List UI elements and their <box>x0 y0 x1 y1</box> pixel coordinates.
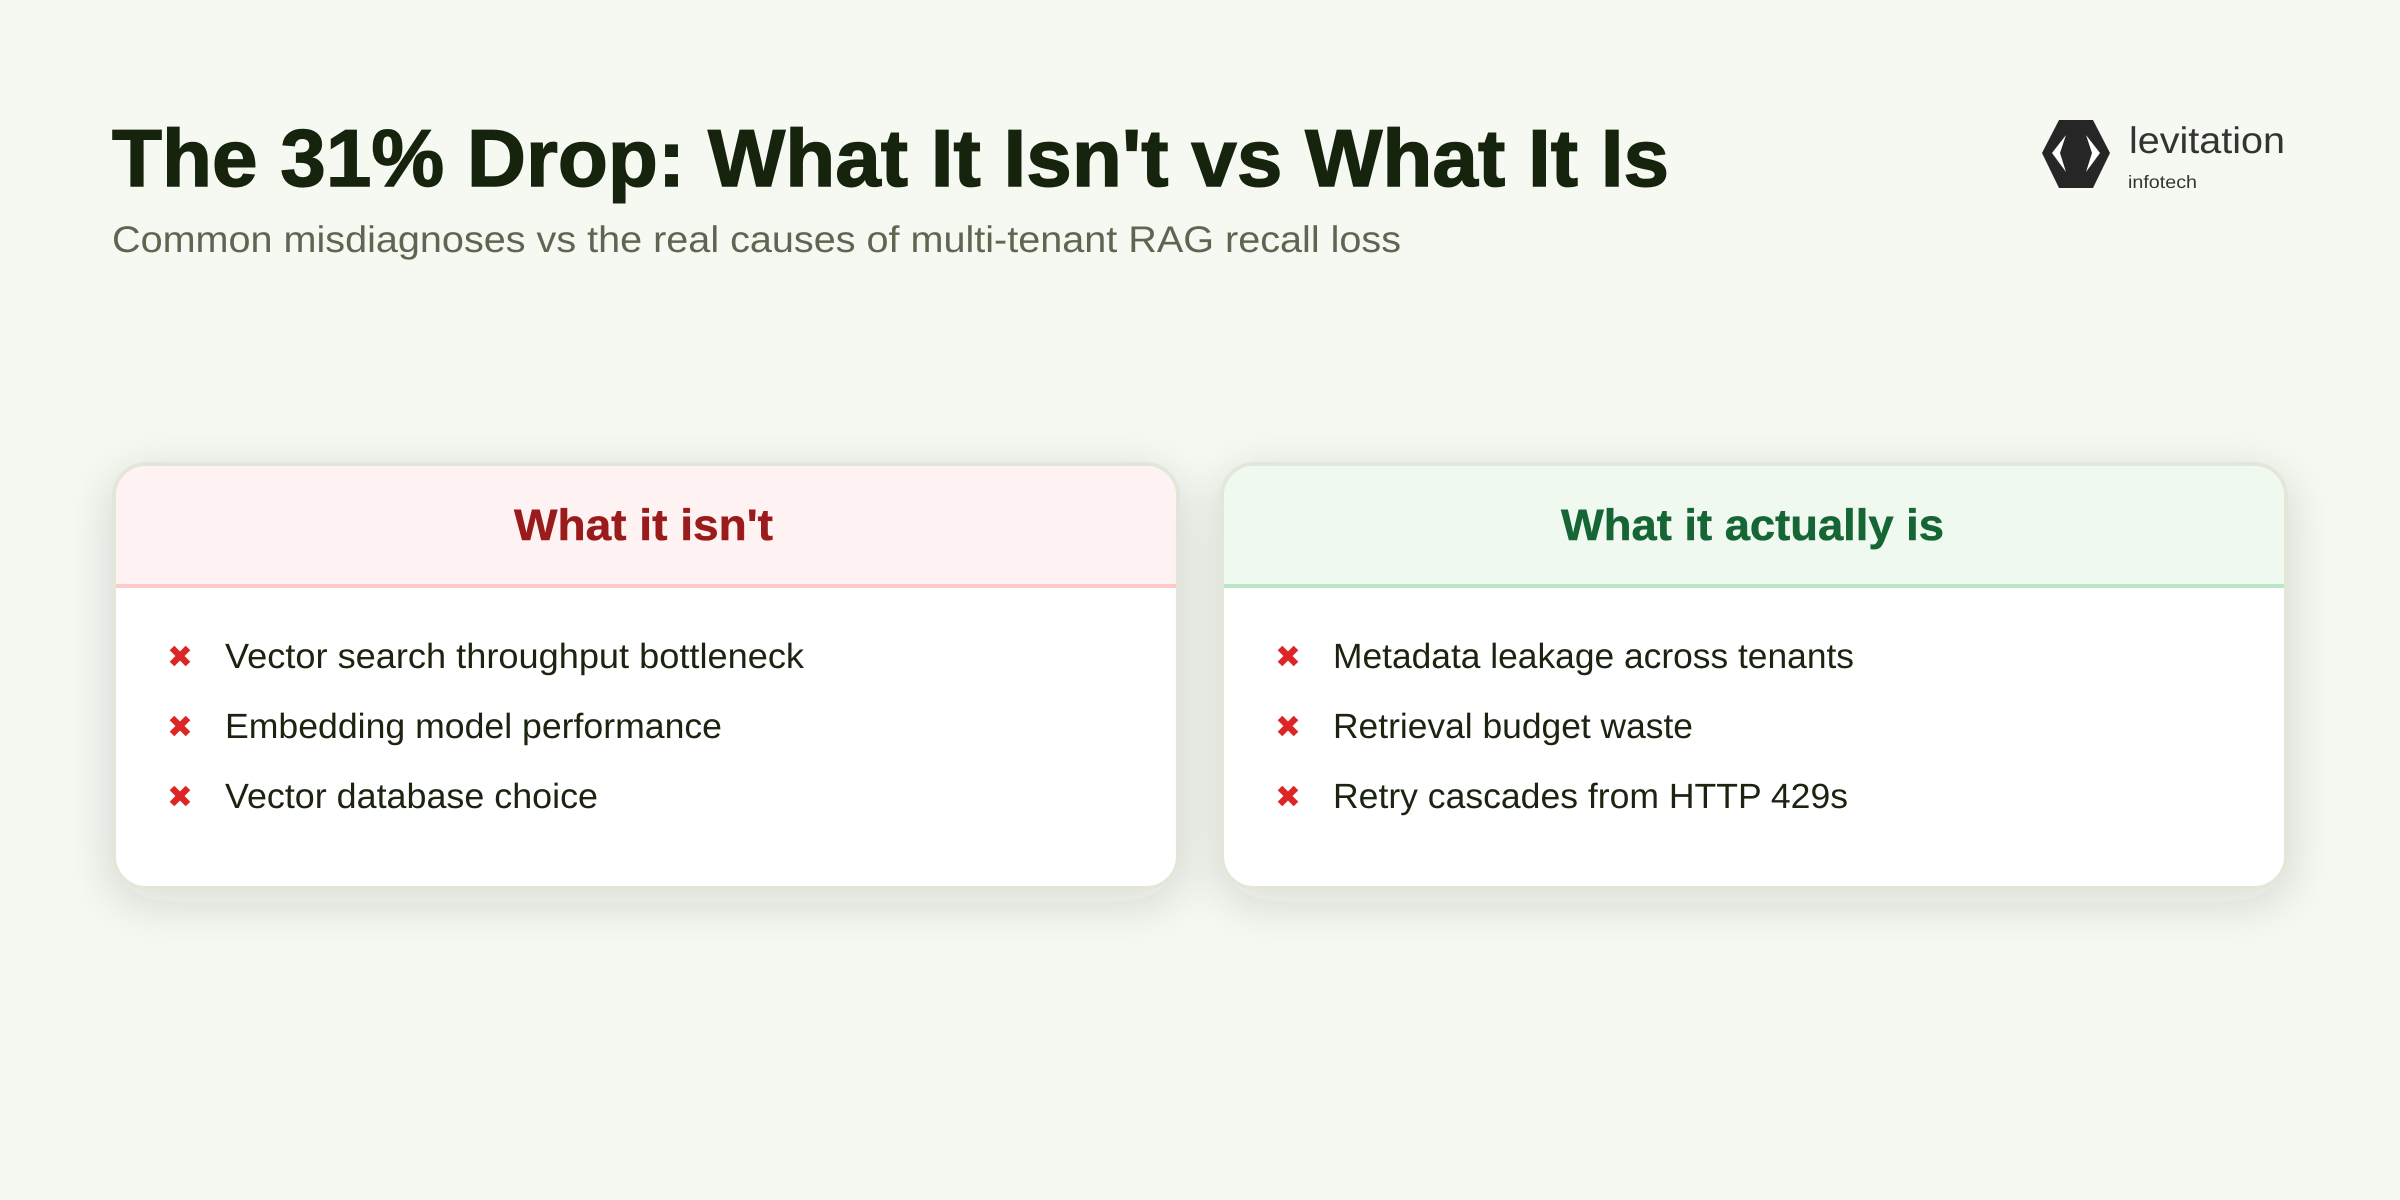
list item 1: Metadata leakage across tenants <box>1333 637 1854 676</box>
logo: levitation infotech <box>2042 120 2285 192</box>
panel: what it actually is <box>1222 464 2286 888</box>
icon: hexagon with chevrons <box>2042 120 2110 188</box>
list item 2: Retrieval budget waste <box>1333 707 1693 746</box>
panel header: what it isn't <box>116 466 1176 588</box>
panel: what it isn't <box>114 464 1178 888</box>
panel header: what it actually is: What it actually is <box>1561 501 1944 550</box>
subtitle: Common misdiagnoses vs the real causes of multi-tenant RAG recall loss <box>112 219 1401 260</box>
list item 3: Retry cascades from HTTP 429s <box>1333 777 1848 816</box>
list item 3: Vector database choice <box>225 777 598 816</box>
logo subtext: infotech <box>2128 172 2197 192</box>
list: real causes <box>1280 637 1854 816</box>
list item 1: Vector search throughput bottleneck <box>225 637 805 676</box>
logo wordmark: levitation <box>2129 120 2285 161</box>
panel header: what it actually is <box>1224 466 2284 588</box>
panel header: what it isn't: What it isn't <box>514 501 773 550</box>
list: misdiagnoses <box>172 637 805 816</box>
title: The 31% Drop: What It Isn't vs What It Is <box>112 114 1669 204</box>
list item 2: Embedding model performance <box>225 707 722 746</box>
